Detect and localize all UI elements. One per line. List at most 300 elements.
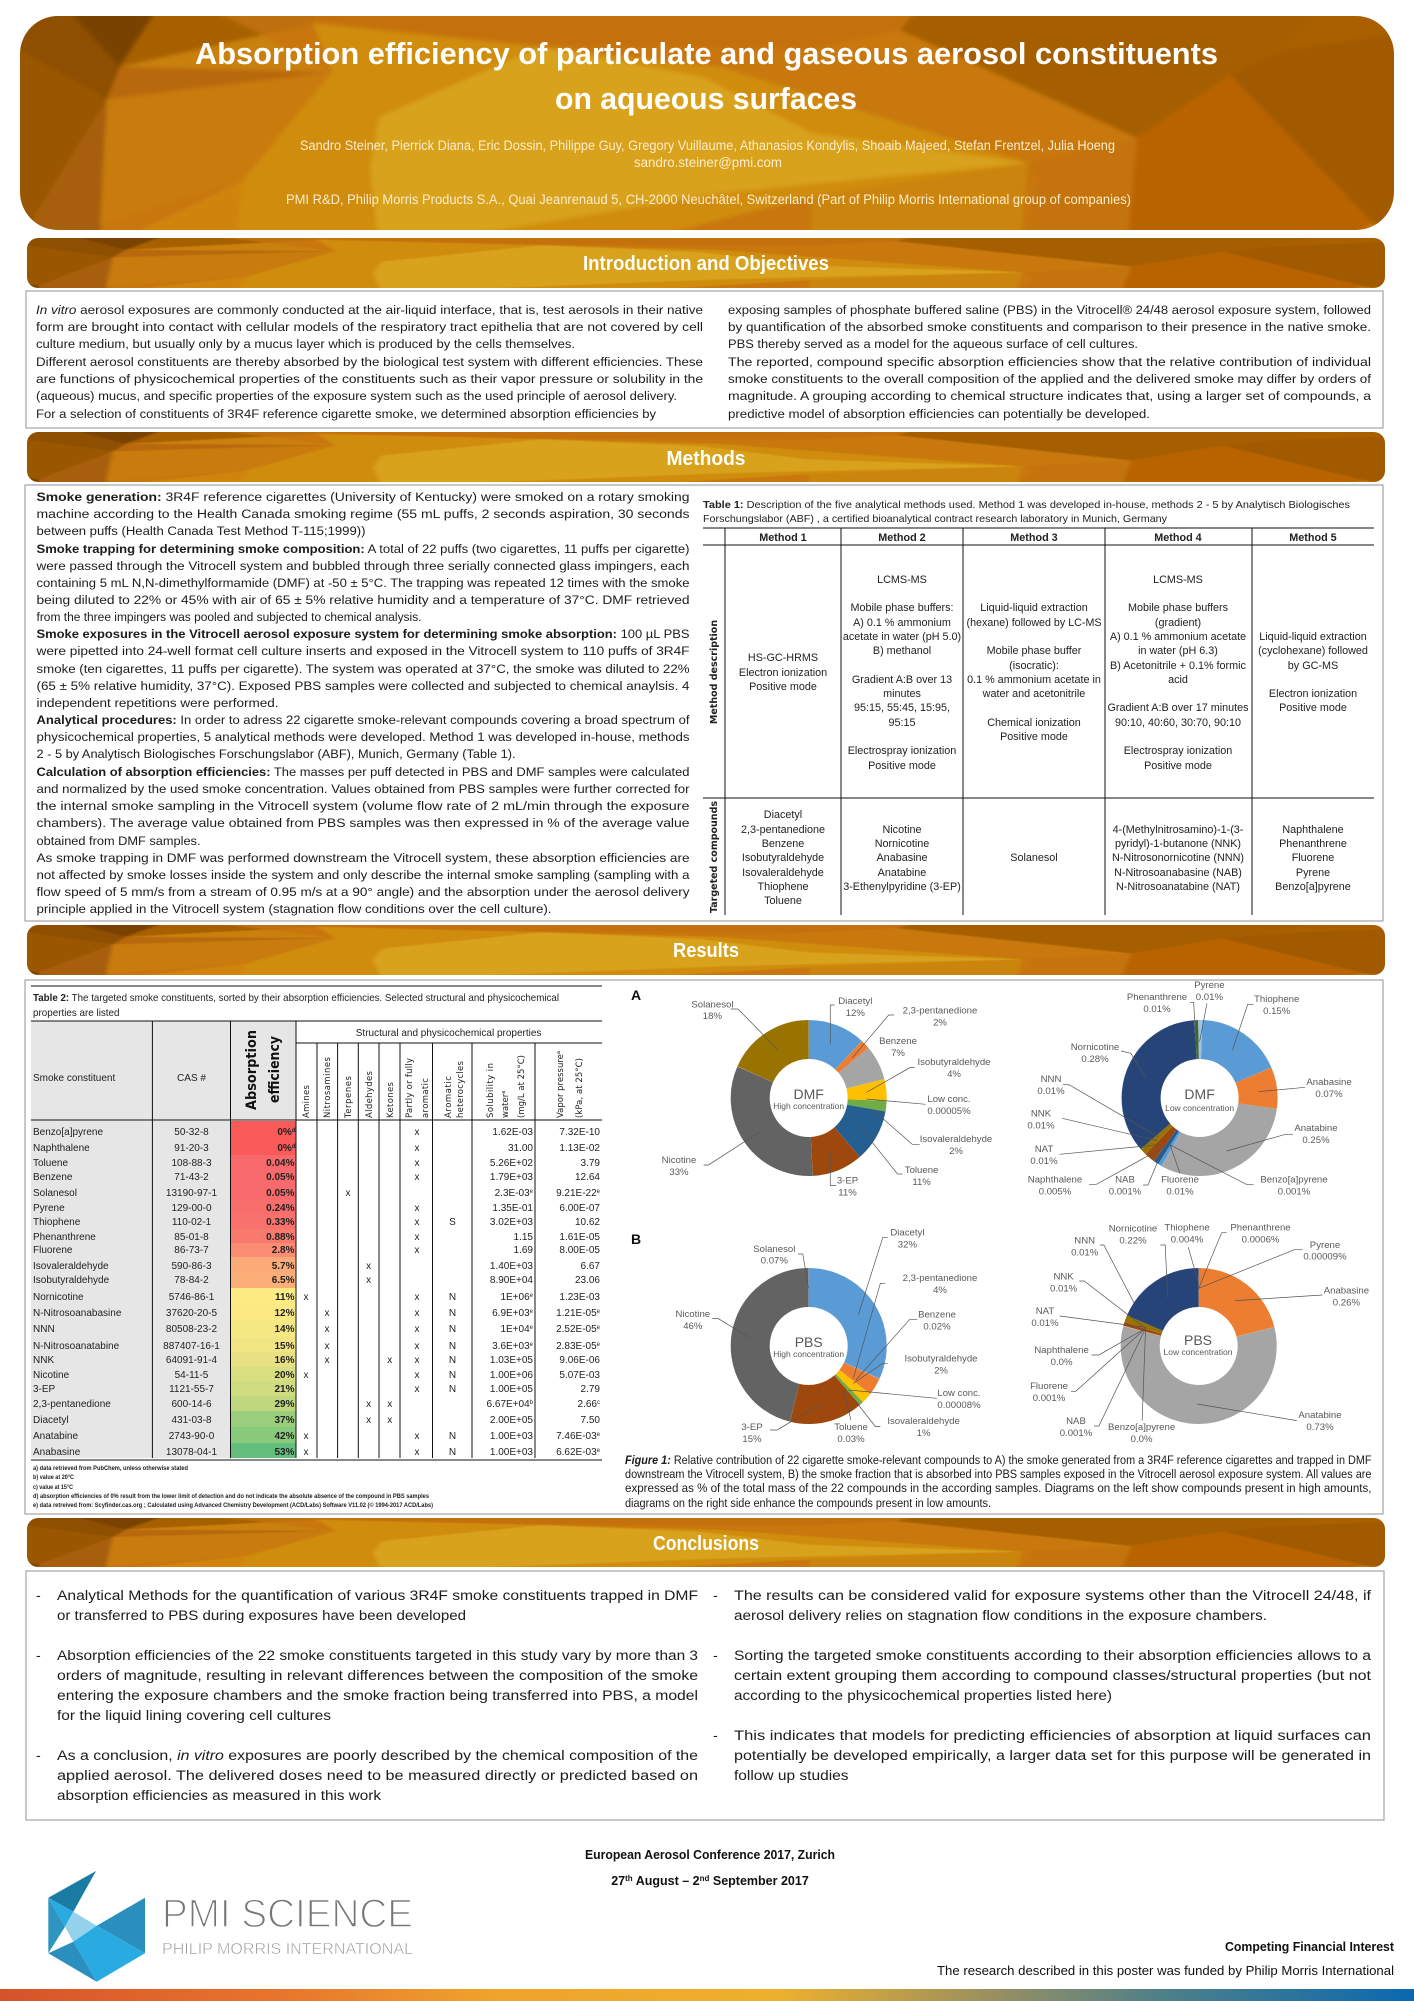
- CAS numbers: 108-88-3: [171, 1158, 212, 1169]
- conference information: September 2017: [709, 1874, 809, 1888]
- donut chart B labels: Naphthalene: [1034, 1345, 1089, 1356]
- constituent names: Phenanthrene: [33, 1232, 96, 1243]
- donut chart: DMF low concentration: [1117, 1015, 1282, 1181]
- intro left column: [36, 303, 703, 421]
- donut chart B labels: 0.00008%: [937, 1400, 981, 1411]
- conclusions right column: Sorting the targeted smoke constituents according to their absorption efficiencies allows to a: [734, 1648, 1371, 1664]
- methods text: were passed through the Vitrocell system and bubbled through three serially connected glass impingers, each: [35, 559, 690, 573]
- table 2 header labels: [33, 1028, 585, 1119]
- authors: Sandro Steiner, Pierrick Diana, Eric Dossin, Philippe Guy, Gregory Vuillaume, Athanasios Kondylis, Shoaib Majeed, Stefan Frentzel, Julia Hoeng: [300, 138, 1115, 153]
- absorption efficiency values: 29%: [274, 1399, 295, 1410]
- structural property marks: x: [304, 1431, 308, 1442]
- vapor pressure values: 2.83E-05: [556, 1341, 597, 1352]
- CAS numbers: 2743-90-0: [169, 1431, 215, 1442]
- donut chart B labels: 32%: [898, 1240, 917, 1250]
- conference information: 27: [611, 1874, 625, 1888]
- structural property marks: S: [449, 1217, 456, 1228]
- rotated property headers: Solubility in: [486, 1063, 496, 1118]
- absorption efficiency values: 0%: [277, 1143, 292, 1154]
- rotated property headers: (mg/L at 25°C): [517, 1055, 527, 1118]
- donut chart A labels: NNK: [1031, 1108, 1052, 1120]
- donut chart A labels: NNN: [1041, 1074, 1061, 1085]
- donut chart A leader lines: [704, 1002, 1305, 1186]
- donut chart B labels: 0.03%: [837, 1434, 865, 1445]
- donut chart A labels: 2%: [949, 1146, 963, 1157]
- donut chart A labels: Pyrene: [1194, 980, 1225, 991]
- targeted compounds row: N-Nitrosoanabasine (NAB): [1114, 867, 1242, 879]
- table 1 column headers: Method 2: [878, 532, 926, 544]
- methods text: obtained from DMF samples.: [36, 834, 200, 848]
- vapor pressure values: 7.46E-03: [556, 1431, 597, 1442]
- targeted compounds row: N-Nitrosonornicotine (NNN): [1112, 852, 1244, 864]
- solubility values: 1.62E-03: [492, 1127, 533, 1138]
- vapor pressure values: 9.21E-22: [556, 1188, 597, 1199]
- absorption efficiency values: d: [292, 1128, 296, 1134]
- donut chart B labels: 0.01%: [1071, 1248, 1099, 1258]
- structural property marks: x: [414, 1324, 420, 1335]
- absorption efficiency values: 11%: [275, 1292, 295, 1303]
- donut chart B labels: Diacetyl: [890, 1228, 924, 1238]
- conference information: [585, 1848, 835, 1888]
- structural property marks: x: [366, 1399, 371, 1410]
- donut chart B labels: 2,3-pentanedione: [903, 1273, 977, 1284]
- figure 1 caption: expressed as % of the total mass of the 22 compounds in the according samples. Diagrams on the left show compounds present in high amounts,: [625, 1481, 1372, 1495]
- table 1 column headers: Method 1: [759, 532, 807, 544]
- conclusions left column: Analytical Methods for the quantification of various 3R4F smoke constituents trapped in DMF: [57, 1588, 698, 1604]
- table 1 caption: Table 1: Description of the five analytical methods used. Method 1 was developed in-house, methods 2 - 5 by Analytisch Biologisches: [703, 499, 1350, 511]
- donut chart A labels: 0.01%: [1030, 1156, 1058, 1167]
- table 1 caption: [703, 499, 1350, 525]
- panel: methods: [25, 485, 1383, 921]
- donut chart B labels: Toluene: [834, 1422, 868, 1433]
- methods text: Analytical procedures: In order to adress 22 cigarette smoke-relevant compounds covering a broad spectrum of: [36, 713, 690, 727]
- constituent names: 3-EP: [33, 1384, 56, 1395]
- solubility values: e: [530, 1325, 534, 1331]
- targeted compounds row: Benzene: [762, 838, 804, 850]
- absorption efficiency values: 0.05%: [266, 1188, 295, 1199]
- structural property marks: x: [414, 1355, 420, 1366]
- intro right column: exposing samples of phosphate buffered saline (PBS) in the Vitrocell® 24/48 aerosol exposure system, followed: [728, 303, 1371, 317]
- vapor pressure values: 6.67: [581, 1261, 600, 1272]
- methods text: Smoke generation: 3R4F reference cigarettes (University of Kentucky) were smoked on a rotary smoking: [36, 490, 690, 504]
- donut chart A labels: 0.01%: [1027, 1120, 1055, 1132]
- donut chart A labels: Naphthalene: [1028, 1174, 1082, 1186]
- solubility values: 5.26E+02: [490, 1158, 533, 1169]
- donut chart B labels: Low conc.: [937, 1388, 981, 1399]
- constituent names: Isovaleraldehyde: [33, 1261, 109, 1272]
- donut chart B labels: Isovaleraldehyde: [887, 1416, 960, 1427]
- CAS numbers: 64091-91-4: [166, 1355, 218, 1366]
- conclusions right column: follow up studies: [734, 1768, 848, 1784]
- donut chart A labels: 4%: [947, 1069, 961, 1080]
- CAS numbers: 590-86-3: [171, 1261, 212, 1272]
- figure label B: B: [631, 1231, 641, 1247]
- structural property marks: N: [449, 1324, 456, 1335]
- targeted compounds row: Nornicotine: [875, 838, 929, 850]
- panel: results: [25, 980, 1383, 1514]
- donut chart A labels: 0.28%: [1081, 1054, 1109, 1065]
- donut chart B labels: 0.001%: [1033, 1393, 1066, 1404]
- vapor pressure values: e: [597, 1448, 601, 1454]
- table 2: [31, 986, 602, 1509]
- solubility values: 1.00E+03: [490, 1447, 533, 1458]
- intro left column: are functions of physicochemical properties of the constituents such as their vapor pressure or solubility in the: [36, 372, 703, 386]
- rotated property headers: Partly or fully: [405, 1058, 415, 1118]
- CAS numbers: 1121-55-7: [169, 1384, 214, 1395]
- CAS numbers: 110-02-1: [172, 1217, 212, 1228]
- donut chart B labels: NAB: [1066, 1416, 1086, 1427]
- donut chart B labels: 0.73%: [1306, 1422, 1334, 1433]
- structural property marks: x: [324, 1355, 330, 1366]
- competing financial interest statement: The research described in this poster was funded by Philip Morris International: [937, 1963, 1394, 1978]
- donut chart B labels: 0.22%: [1119, 1236, 1147, 1246]
- table 2 footnotes: [33, 1466, 433, 1509]
- vapor pressure values: 12.64: [575, 1172, 600, 1183]
- absorption efficiency values: 2.8%: [272, 1245, 295, 1256]
- donut chart A labels: 0.01%: [1166, 1186, 1194, 1198]
- constituent names: N-Nitrosoanabasine: [33, 1308, 122, 1319]
- structural property marks: N: [449, 1384, 456, 1395]
- CAS numbers: 13078-04-1: [166, 1447, 218, 1458]
- donut chart B labels: 0.004%: [1171, 1234, 1204, 1246]
- CAS numbers: [163, 1127, 220, 1458]
- CAS numbers: 71-43-2: [174, 1172, 209, 1183]
- methods text: between puffs (Health Canada Test Method T-115;1999)): [36, 524, 366, 538]
- structural property marks: x: [366, 1415, 371, 1426]
- method 2 cell: LCMS-MS: [877, 574, 927, 586]
- method 3 cell: [966, 602, 1102, 743]
- targeted compounds row: Benzo[a]pyrene: [1275, 881, 1351, 893]
- vapor pressure values: 7.50: [581, 1415, 600, 1426]
- structural property marks: x: [387, 1399, 392, 1410]
- donut chart A labels: 0.01%: [1196, 992, 1223, 1003]
- targeted compounds row: pyridyl)-1-butanone (NNK): [1115, 838, 1241, 850]
- vapor pressure values: 2.79: [581, 1384, 600, 1395]
- structural property marks: x: [414, 1217, 420, 1228]
- CAS numbers: 600-14-6: [171, 1399, 212, 1410]
- table 1 column headers: Method 5: [1289, 532, 1337, 544]
- conclusions left column: orders of magnitude, resulting in relevant differences between the composition of the smoke: [57, 1668, 698, 1684]
- donut chart A labels: Isobutyraldehyde: [917, 1057, 991, 1068]
- conference information: European Aerosol Conference 2017, Zurich: [585, 1848, 835, 1862]
- donut chart A labels: 3-EP: [837, 1176, 858, 1186]
- donut chart B labels: 1%: [917, 1428, 931, 1439]
- donut chart A labels: [662, 980, 1352, 1198]
- structural property marks: x: [324, 1308, 330, 1319]
- structural property marks: x: [414, 1292, 420, 1303]
- panel: introduction text: [26, 291, 1383, 428]
- donut chart A labels: 2,3-pentanedione: [903, 1006, 977, 1016]
- structural property marks: x: [304, 1370, 308, 1381]
- vapor pressure values: 10.62: [575, 1217, 600, 1228]
- conclusions left column: applied aerosol. The delivered doses need to be measured directly or predicted based on: [57, 1768, 698, 1784]
- table 1 rules: [703, 528, 1374, 915]
- donut chart A labels: 2%: [933, 1018, 947, 1028]
- structural property marks: x: [346, 1188, 350, 1199]
- table 2 caption: [33, 992, 559, 1019]
- method 2 cell: 95:15, 55:45, 15:95,: [854, 702, 950, 714]
- method 4 cell: acid: [1168, 674, 1188, 686]
- method 2 cell: 95:15: [888, 717, 916, 729]
- constituent names: 2,3-pentanedione: [33, 1399, 111, 1410]
- method 3 cell: Mobile phase buffer: [987, 645, 1082, 657]
- solubility values: 8.90E+04: [490, 1275, 533, 1286]
- method 1 cell: Electron ionization: [739, 667, 827, 679]
- donut chart B labels: 4%: [933, 1285, 947, 1296]
- targeted compounds row: Thiophene: [757, 881, 809, 893]
- donut chart A labels: 18%: [703, 1011, 722, 1022]
- structural property marks: N: [449, 1341, 456, 1352]
- conclusions left column: -: [36, 1648, 41, 1664]
- constituent names: Thiophene: [33, 1217, 81, 1228]
- donut chart B labels: 0.07%: [761, 1256, 788, 1266]
- row labels: Method description: [709, 620, 720, 724]
- method 5 cell: Electron ionization: [1269, 688, 1357, 700]
- methods text: from the three impingers was pooled and subjected to chemical analysis.: [36, 610, 422, 624]
- absorption efficiency values: 0.33%: [266, 1217, 295, 1228]
- authors: sandro.steiner@pmi.com: [634, 155, 782, 170]
- structural property marks: x: [324, 1324, 330, 1335]
- method 5 cell: (cyclohexane) followed: [1258, 645, 1368, 657]
- method 5 cell: Positive mode: [1279, 702, 1347, 714]
- conclusions right column: [713, 1588, 1371, 1784]
- title: on aqueous surfaces: [555, 81, 857, 116]
- solubility values: e: [530, 1342, 534, 1348]
- methods text: flow speed of 5 mm/s from a stream of 0.95 m/s at a 90° angle) and the absorption under the aerosol delivery: [36, 885, 690, 899]
- CAS numbers: 80508-23-2: [166, 1324, 218, 1335]
- donut chart B labels: 0.0006%: [1242, 1234, 1280, 1246]
- donut chart A labels: Benzo[a]pyrene: [1260, 1174, 1328, 1186]
- CAS numbers: 85-01-8: [174, 1232, 209, 1243]
- structural property marks: N: [449, 1292, 456, 1303]
- solubility values: 2.3E-03: [495, 1188, 530, 1199]
- method 3 cell: (hexane) followed by LC-MS: [966, 617, 1102, 629]
- solubility values: e: [530, 1309, 534, 1315]
- donut chart A labels: Low conc.: [927, 1094, 971, 1105]
- methods text: being diluted to 22% or 45% with air of 65 ± 5% relative humidity and a temperature of 37°C. DMF retrieved: [36, 593, 690, 607]
- donut chart B labels: Anabasine: [1324, 1286, 1369, 1296]
- section heading: Conclusions: Conclusions: [653, 1533, 759, 1555]
- absorption efficiency colour scale: [230, 1121, 296, 1458]
- donut chart A labels: 7%: [891, 1048, 905, 1059]
- donut chart A labels: 12%: [846, 1008, 865, 1019]
- intro right column: smoke constituents to the overall composition of the applied and the delivered smoke may differ by orders of: [728, 372, 1372, 386]
- donut chart A labels: Fluorene: [1161, 1174, 1199, 1186]
- conclusions left column: As a conclusion, in vitro exposures are poorly described by the chemical composition of the: [57, 1748, 698, 1764]
- method 2 cell: acetate in water (pH 5.0): [843, 631, 961, 643]
- conclusions left column: -: [36, 1748, 41, 1764]
- donut chart B labels: 0.01%: [1050, 1284, 1078, 1294]
- donut chart B labels: PBS: [1184, 1332, 1212, 1348]
- donut chart B labels: 0.0%: [1051, 1357, 1073, 1368]
- donut chart B labels: Isobutyraldehyde: [904, 1354, 978, 1364]
- donut chart A labels: 0.005%: [1039, 1186, 1072, 1198]
- absorption efficiency values: 42%: [274, 1431, 295, 1442]
- figure label A: A: [631, 987, 641, 1003]
- donut chart B labels: Anatabine: [1298, 1410, 1342, 1421]
- structural property marks: x: [414, 1245, 420, 1256]
- CAS numbers: 37620-20-5: [166, 1308, 218, 1319]
- methods text: Smoke trapping for determining smoke composition: A total of 22 puffs (two cigarettes, 11 puffs per cigarette): [36, 542, 690, 556]
- donut chart B labels: Fluorene: [1030, 1381, 1068, 1392]
- rotated property headers: Ketones: [386, 1081, 396, 1118]
- conference information: August – 2: [633, 1874, 700, 1888]
- section heading: Introduction and Objectives: Introduction and Objectives: [583, 253, 829, 275]
- method 2 cell: [843, 574, 961, 772]
- solubility values: 1.03E+05: [490, 1355, 533, 1366]
- donut chart A labels: 0.01%: [1143, 1004, 1171, 1015]
- donut chart B leader lines: [712, 1233, 1322, 1430]
- donut chart B labels: High concentration: [773, 1349, 844, 1359]
- donut chart A labels: 33%: [669, 1167, 689, 1178]
- structural property marks: x: [414, 1308, 420, 1319]
- method 3 cell: Liquid-liquid extraction: [980, 602, 1088, 614]
- footer colour strip: [0, 1989, 1414, 2001]
- solubility values: 2.00E+05: [490, 1415, 533, 1426]
- rotated property headers: water: [501, 1094, 511, 1118]
- absorption efficiency values: 0.04%: [266, 1158, 295, 1169]
- donut chart A labels: Phenanthrene: [1127, 992, 1187, 1003]
- solubility values: e: [530, 1189, 534, 1195]
- solubility values: [487, 1127, 534, 1458]
- vapor pressure values: 3.79: [581, 1158, 600, 1169]
- structural property marks: N: [449, 1431, 456, 1442]
- method 4 cell: [1107, 574, 1249, 772]
- absorption efficiency values: 0.05%: [266, 1172, 295, 1183]
- absorption efficiency values: 16%: [274, 1355, 295, 1366]
- donut chart: PBS high concentration: [726, 1263, 891, 1429]
- vapor pressure values: e: [597, 1309, 601, 1315]
- rotated property headers: Aromatic: [444, 1076, 454, 1118]
- table 2 caption: properties are listed: [33, 1007, 120, 1019]
- conclusions right column: certain extent grouping them according to compound classes/structural properties (but not: [734, 1668, 1371, 1684]
- section heading: Results: Results: [673, 940, 739, 962]
- conclusions right column: The results can be considered valid for exposure systems other than the Vitrocell 24/48, if: [734, 1588, 1371, 1604]
- structural property marks: x: [414, 1384, 420, 1395]
- CAS numbers: 54-11-5: [175, 1370, 209, 1381]
- table 2 footnotes: d) absorption efficiencies of 0% result from the lower limit of detection and do not indicate the absolute absence of the compound in PBS samples: [33, 1494, 430, 1500]
- donut chart B labels: Benzo[a]pyrene: [1108, 1422, 1175, 1433]
- donut chart B labels: 2%: [934, 1366, 948, 1376]
- donut chart A labels: Nornicotine: [1071, 1042, 1119, 1053]
- constituent names: Benzene: [33, 1172, 73, 1183]
- donut chart A labels: 0.001%: [1109, 1186, 1142, 1198]
- structural property marks: x: [414, 1341, 420, 1352]
- donut chart A labels: Anabasine: [1306, 1077, 1352, 1088]
- methods text: independent repetitions were performed.: [36, 696, 278, 710]
- intro right column: predictive model of absorption efficiencies can potentially be developed.: [728, 407, 1150, 421]
- section heading: Methods: [27, 432, 1385, 482]
- competing financial interest statement: Competing Financial Interest: [1225, 1939, 1395, 1954]
- rotated property headers: Terpenes: [344, 1075, 354, 1119]
- method 4 cell: 90:10, 40:60, 30:70, 90:10: [1115, 717, 1241, 729]
- intro left column: For a selection of constituents of 3R4F reference cigarette smoke, we determined absorption efficiencies by: [36, 407, 657, 421]
- intro left column: (aqueous) mucus, and specific properties of the exposure system such as the used principle of aerosol delivery.: [36, 389, 677, 403]
- method 4 cell: Mobile phase buffers: [1128, 602, 1229, 614]
- table 2 footnotes: e) data retreived from: Scyfinder.cas.org ; Calculated using Advanced Chemistry Development (ACD/Labs) Software V11.02 (© 1994-2017 ACD/Labs): [33, 1502, 433, 1509]
- CAS numbers: 50-32-8: [174, 1127, 209, 1138]
- donut chart B labels: 0.0%: [1131, 1434, 1153, 1445]
- table 2 footnotes: c) value at 15°C: [33, 1485, 74, 1491]
- figure 1 caption: [625, 1453, 1372, 1510]
- rotated property headers: a: [501, 1091, 507, 1094]
- solubility values: 3.6E+03: [492, 1341, 530, 1352]
- figure 1 caption: diagrams on the right side enhance the compounds present in low amounts.: [625, 1496, 991, 1510]
- structural property marks: x: [414, 1431, 420, 1442]
- donut chart A labels: DMF: [1184, 1086, 1215, 1102]
- section heading: Conclusions: [27, 1518, 1385, 1567]
- targeted compounds row: 2,3-pentanedione: [741, 824, 825, 836]
- absorption efficiency values: 14%: [274, 1324, 295, 1335]
- vapor pressure values: 7.32E-10: [559, 1127, 600, 1138]
- solubility values: 3.02E+03: [490, 1217, 533, 1228]
- donut chart B labels: Nicotine: [675, 1309, 710, 1320]
- CAS numbers: 887407-16-1: [163, 1341, 220, 1352]
- structural property marks: x: [414, 1203, 420, 1214]
- vapor pressure values: 1.21E-05: [556, 1308, 597, 1319]
- intro left column: culture medium, but usually only by a mucus layer which is produced by the cells themselves.: [36, 337, 575, 351]
- methods text: (65 ± 5% relative humidity, 37°C). Exposed PBS samples were collected and subjected to chemical anaylsis. 4: [36, 679, 690, 693]
- structural property marks: x: [324, 1341, 330, 1352]
- section heading: Results: [27, 925, 1385, 975]
- targeted compounds row: Phenanthrene: [1279, 838, 1347, 850]
- structural property marks: x: [387, 1415, 392, 1426]
- donut chart B labels: Low concentration: [1164, 1347, 1233, 1357]
- vapor pressure values: 1.23E-03: [559, 1292, 600, 1303]
- table 2 header labels: CAS #: [177, 1073, 206, 1084]
- method 2 cell: Positive mode: [868, 760, 936, 772]
- vapor pressure values: 6.00E-07: [559, 1203, 600, 1214]
- conclusions right column: -: [713, 1588, 718, 1604]
- absorption efficiency values: 21%: [274, 1384, 295, 1395]
- donut chart A labels: DMF: [794, 1086, 824, 1102]
- donut chart B labels: 0.00009%: [1303, 1252, 1347, 1262]
- conference information: nd: [700, 1874, 710, 1883]
- donut chart A labels: 0.001%: [1278, 1186, 1311, 1198]
- methods text: Calculation of absorption efficiencies: The masses per puff detected in PBS and DMF samples were calculated: [36, 765, 690, 779]
- targeted compounds row: 4-(Methylnitrosamino)-1-(3-: [1113, 824, 1244, 836]
- vapor pressure values: 1.13E-02: [559, 1143, 600, 1154]
- conclusions left column: for the liquid lining covering cell cultures: [57, 1708, 331, 1724]
- donut chart B labels: 3-EP: [741, 1422, 763, 1433]
- method 3 cell: water and acetonitrile: [982, 688, 1085, 700]
- donut chart B labels: Benzene: [918, 1310, 956, 1320]
- constituent names: Naphthalene: [33, 1143, 90, 1154]
- method 4 cell: B) Acetonitrile + 0.1% formic: [1110, 660, 1247, 672]
- CAS numbers: 78-84-2: [174, 1275, 209, 1286]
- donut chart A labels: 0.00005%: [927, 1106, 971, 1117]
- absorption efficiency values: d: [292, 1144, 296, 1150]
- table 2 footnotes: a) data retrieved from PubChem, unless otherwise stated: [33, 1466, 188, 1472]
- methods text: principle applied in the Vitrocell system (stagnation flow conditions over the cell culture).: [36, 902, 552, 916]
- solubility values: 1.69: [514, 1245, 533, 1256]
- donut chart A labels: 0.01%: [1037, 1086, 1065, 1097]
- donut chart A labels: High concentration: [773, 1101, 844, 1111]
- donut chart B labels: Solanesol: [753, 1244, 795, 1255]
- method 2 cell: B) methanol: [873, 645, 931, 657]
- vapor pressure values: 2.66: [578, 1399, 597, 1410]
- donut chart A labels: 0.07%: [1315, 1089, 1343, 1100]
- constituent names: Isobutyraldehyde: [33, 1275, 110, 1286]
- vapor pressure values: e: [597, 1432, 601, 1438]
- rotated property headers: Amines: [302, 1084, 312, 1118]
- method 5 cell: [1258, 631, 1368, 714]
- conclusions right column: according to the physicochemical properties listed here): [734, 1688, 1112, 1704]
- row labels: [709, 620, 720, 913]
- icon: faceted logo mark: [48, 1871, 145, 1982]
- constituent names: Diacetyl: [33, 1415, 69, 1426]
- methods text: machine according to the Health Canada smoking regime (55 mL puffs, 2 seconds aspiration, 30 seconds: [36, 507, 690, 521]
